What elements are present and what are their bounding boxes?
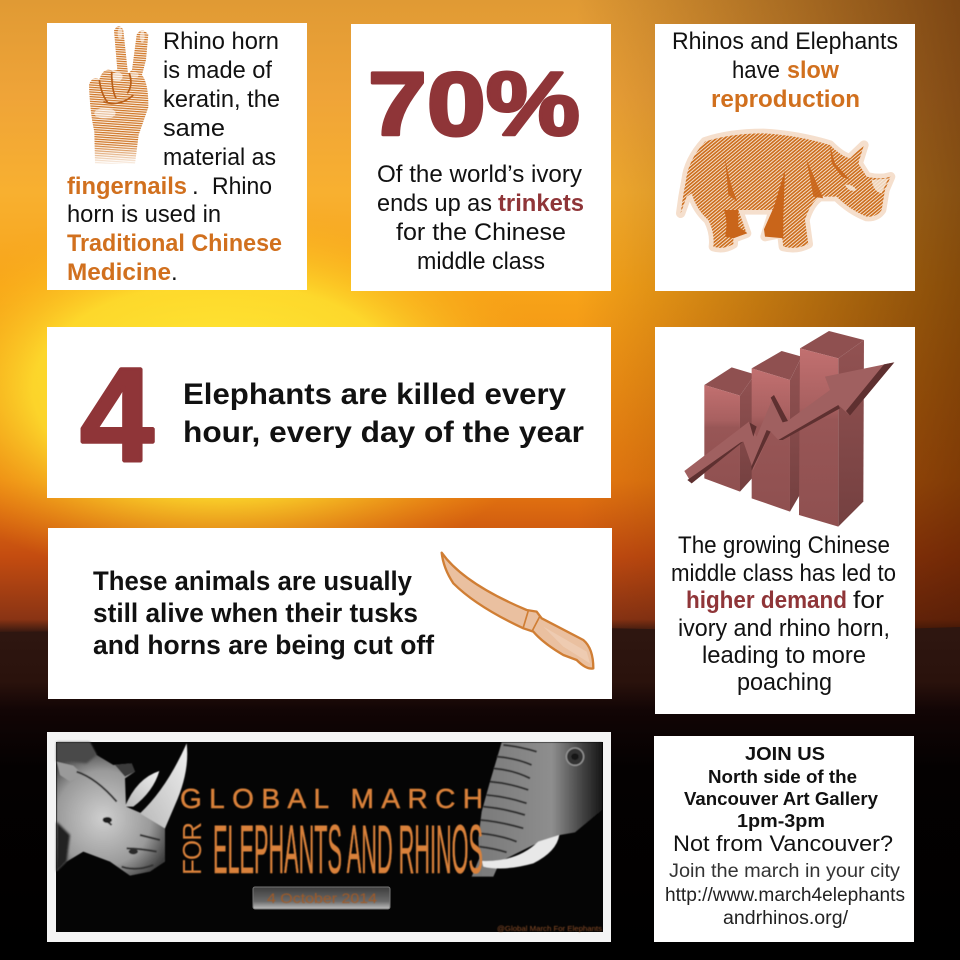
banner: Global March for Elephants and Rhinos <box>47 732 611 942</box>
panel: join us <box>654 736 914 942</box>
panel: rhino horn keratin: . <box>192 173 199 200</box>
panel: growing demand: ivory and rhino horn, <box>678 615 890 642</box>
panel: join us: 1pm-3pm <box>737 811 825 831</box>
panel: still alive: still alive when their tusks <box>93 598 418 628</box>
credit: @Global March For Elephants <box>497 924 602 933</box>
panel: rhino horn keratin: material as <box>163 144 276 171</box>
panel: still alive: and horns are being cut off <box>93 630 434 660</box>
panel: rhino horn keratin: Rhino horn <box>163 28 279 55</box>
panel: rhino horn keratin: same <box>163 115 225 142</box>
panel: growing demand: higher demand <box>686 587 847 614</box>
panel: growing demand: for <box>853 587 884 614</box>
panel: rhino horn keratin: is made of <box>163 57 272 84</box>
panel: slow reproduction <box>655 24 915 291</box>
photo: rhino head <box>57 742 187 876</box>
panel: rhino horn keratin: Rhino <box>212 173 272 200</box>
big number: 4: 4 <box>80 341 154 490</box>
panel: slow reproduction: reproduction <box>711 86 860 113</box>
panel: rhino horn keratin <box>47 23 307 290</box>
panel: rhino horn keratin: fingernails <box>67 173 187 200</box>
panel: rhino horn keratin: . <box>171 259 178 286</box>
icon: hand with two fingers raised <box>89 26 148 165</box>
panel: join us: andrhinos.org/ <box>723 908 849 929</box>
panel: 70% of ivory: for the Chinese <box>396 219 566 246</box>
panel: 4 elephants killed: hour, every day of the year <box>183 416 584 449</box>
banner title: GLOBAL MARCH <box>180 783 483 814</box>
banner title <box>177 783 483 888</box>
photo: elephant head and tusk <box>472 742 602 877</box>
panel: growing demand: poaching <box>737 669 832 696</box>
date badge <box>253 887 390 909</box>
panel: 70% of ivory: ends up as <box>377 190 492 217</box>
panel: 4 elephants killed: Elephants are killed every <box>183 378 566 411</box>
panel: 70% of ivory: middle class <box>417 248 545 275</box>
panel: rhino horn keratin: horn is used in <box>67 201 221 228</box>
panel: join us: North side of the <box>708 767 857 787</box>
panel: 4 elephants killed <box>47 327 611 498</box>
icon: engraved rhino <box>681 133 891 248</box>
panel: slow reproduction: slow <box>787 57 839 84</box>
panel: join us: Not from Vancouver? <box>673 831 893 856</box>
chart icon: rising bars with arrow <box>684 331 894 527</box>
panel: still alive: These animals are usually <box>93 566 412 596</box>
panel: 70% of ivory: Of the world’s ivory <box>377 161 582 188</box>
panel: rhino horn keratin: Medicine <box>67 259 171 286</box>
panel: still alive <box>48 528 612 699</box>
panel: join us: Vancouver Art Gallery <box>684 789 878 809</box>
panel: join us: http://www.march4elephants <box>665 885 905 906</box>
panel: growing demand: The growing Chinese <box>678 532 890 559</box>
panel: join us: JOIN US <box>745 744 825 764</box>
panel: 70% of ivory: trinkets <box>498 190 584 217</box>
panel: rhino horn keratin: Traditional Chinese <box>67 230 282 257</box>
big number: 70%: 70% <box>368 55 580 155</box>
date badge: 4 October 2014 <box>267 890 377 906</box>
panel: slow reproduction: have <box>732 57 780 84</box>
panel: slow reproduction: Rhinos and Elephants <box>672 28 898 55</box>
panel: 70% of ivory <box>351 24 611 291</box>
icon: knife <box>442 553 593 669</box>
panel: rhino horn keratin: keratin, the <box>163 86 280 113</box>
panel: growing demand: middle class has led to <box>671 560 896 587</box>
banner title: FOR <box>177 822 207 875</box>
panel: join us: Join the march in your city <box>669 861 901 882</box>
panel: growing demand <box>655 327 915 714</box>
panel: growing demand: leading to more <box>702 642 866 669</box>
